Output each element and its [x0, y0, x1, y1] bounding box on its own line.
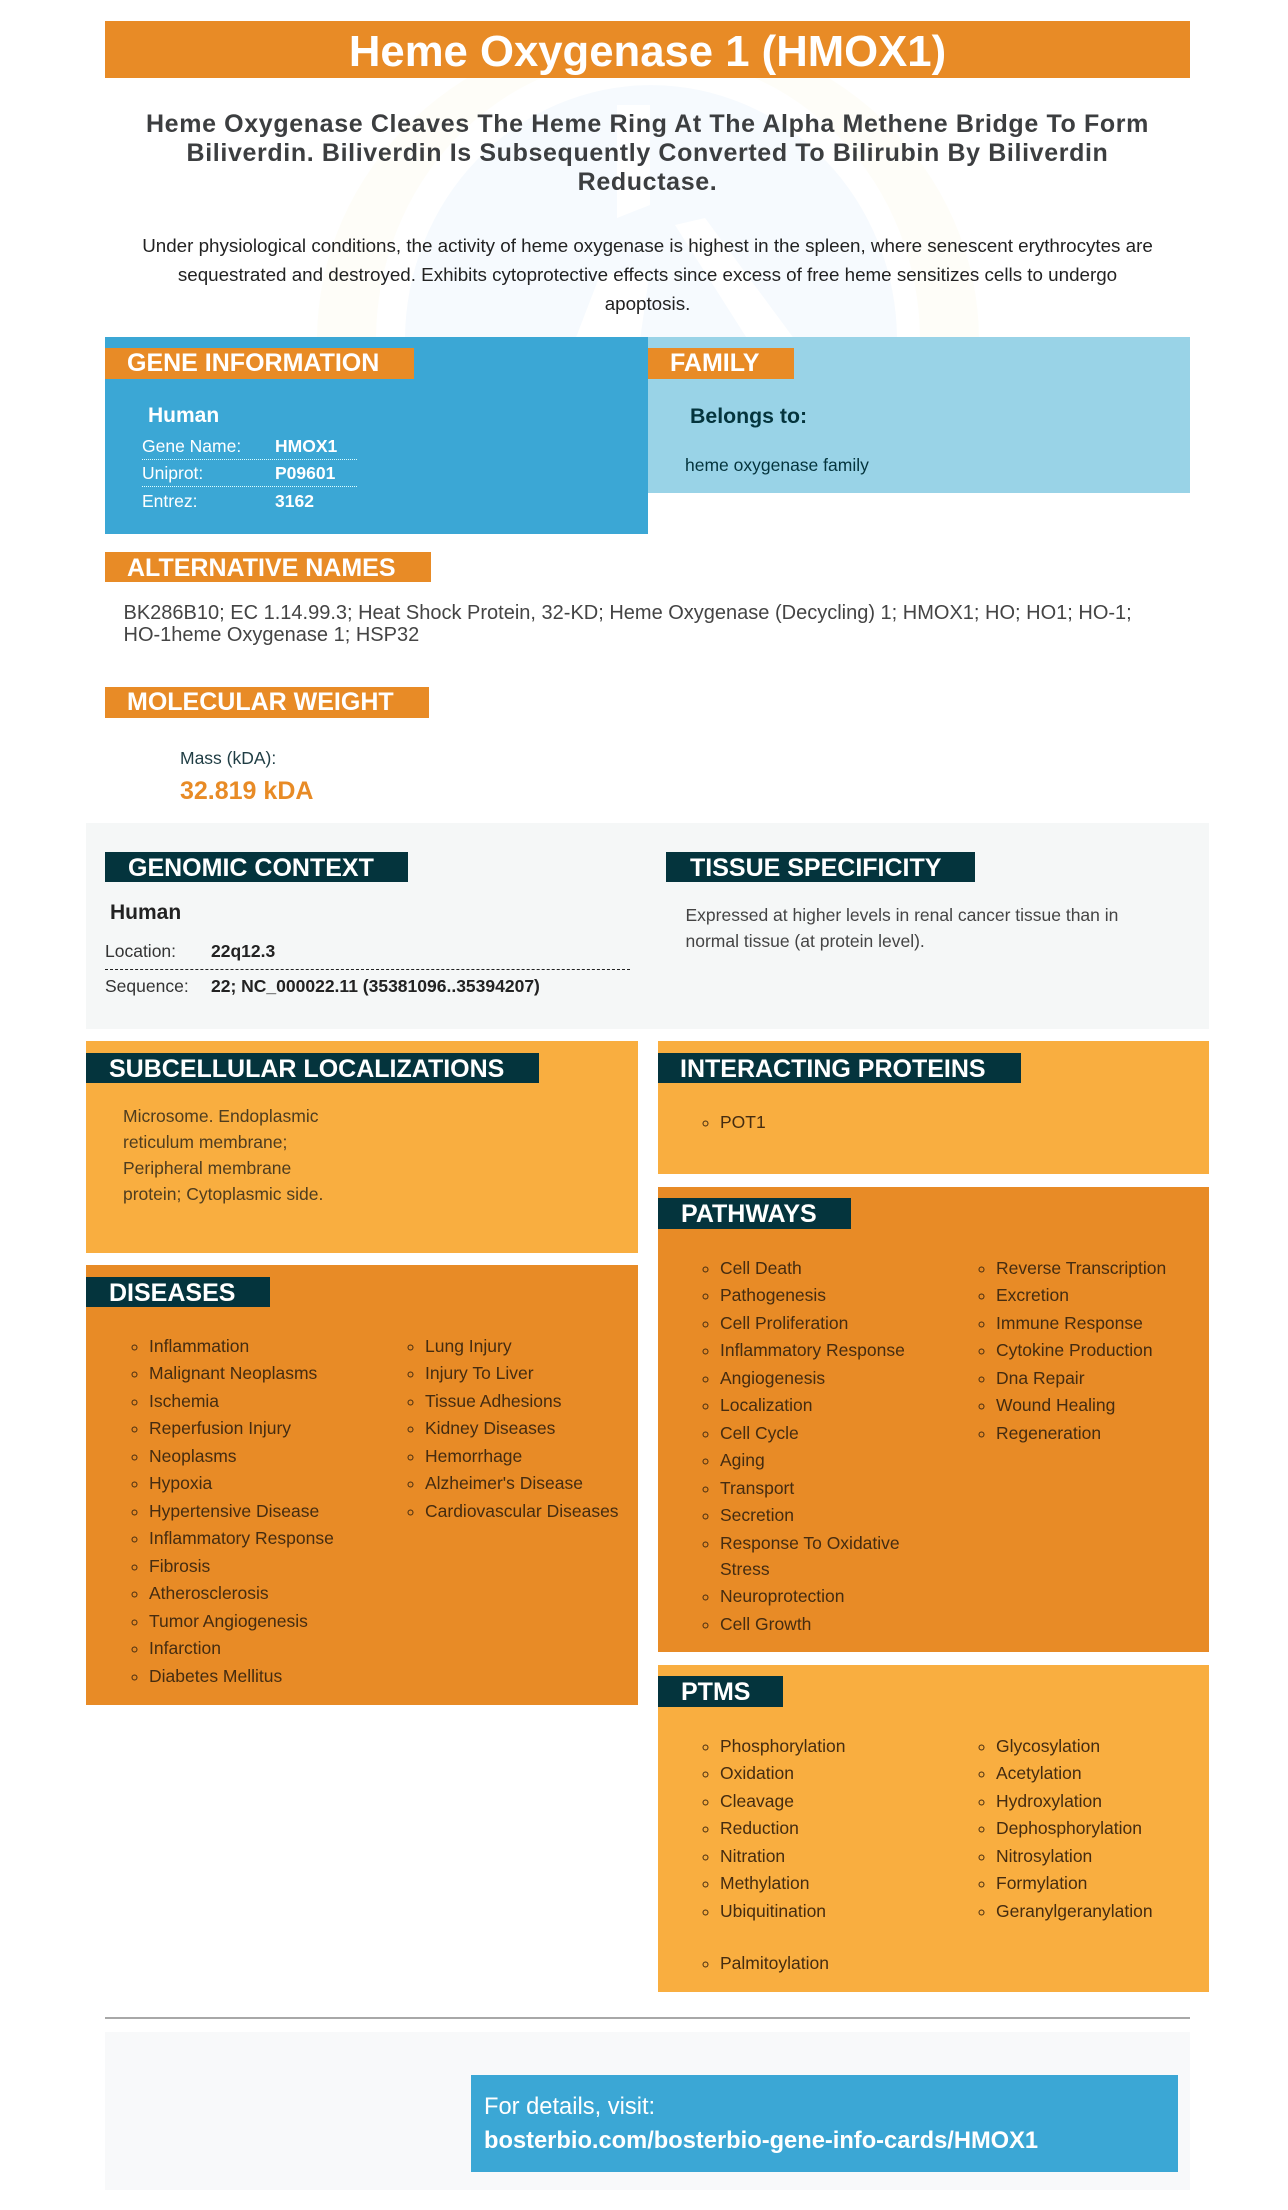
localization text: reticulum membrane;	[123, 1132, 287, 1152]
heading: pathways: PATHWAYS	[681, 1200, 817, 1228]
diseases list column 1: Malignant Neoplasms	[149, 1363, 317, 1383]
panel: subcellular localizations	[86, 1041, 638, 1253]
diseases list column 1: Hypertensive Disease	[149, 1501, 319, 1521]
diseases list column 2: Tissue Adhesions	[425, 1391, 562, 1411]
diseases list column 2: Alzheimer's Disease	[425, 1473, 583, 1493]
uniprot row: P09601	[275, 463, 335, 483]
uniprot row: Uniprot:	[142, 463, 203, 483]
pathways list column 1: Pathogenesis	[720, 1285, 826, 1305]
ptms list column 1: Palmitoylation	[720, 1953, 829, 1973]
gene name row	[142, 433, 357, 460]
ptms list column 2: Hydroxylation	[996, 1791, 1102, 1811]
diseases list column 1: Tumor Angiogenesis	[149, 1611, 308, 1631]
ptms list column 1	[702, 1736, 846, 1973]
ptms list column 2: Dephosphorylation	[996, 1818, 1142, 1838]
protein list: POT1	[720, 1112, 766, 1132]
heading: alternative names: ALTERNATIVE NAMES	[127, 554, 396, 582]
diseases list column 2	[408, 1336, 619, 1521]
ptms list column 1: Reduction	[720, 1818, 799, 1838]
pathways list column 2: Immune Response	[996, 1313, 1143, 1333]
pathways list column 1: Cell Cycle	[720, 1423, 799, 1443]
species label: Human	[110, 901, 181, 924]
localization text	[123, 1106, 323, 1204]
diseases list column 2: Injury To Liver	[425, 1363, 534, 1383]
panel: family	[648, 337, 1190, 493]
pathways list column 2: Excretion	[996, 1285, 1069, 1305]
entrez row	[142, 491, 314, 511]
entrez row: 3162	[275, 491, 314, 511]
pathways list column 1: Cell Proliferation	[720, 1313, 848, 1333]
pathways list column 1: Neuroprotection	[720, 1586, 845, 1606]
ptms list column 1: Methylation	[720, 1873, 810, 1893]
subtitle: Biliverdin. Biliverdin Is Subsequently Converted To Bilirubin By Biliverdin	[187, 139, 1108, 167]
panel: interacting proteins	[658, 1041, 1209, 1174]
ptms list column 1: Oxidation	[720, 1763, 794, 1783]
heading: pathways	[658, 1198, 851, 1229]
diseases list column 2: Kidney Diseases	[425, 1418, 555, 1438]
family name: heme oxygenase family	[685, 455, 869, 475]
pathways list column 1: Stress	[720, 1559, 770, 1579]
pathways list column 1: Response To Oxidative	[720, 1533, 900, 1553]
pathways list column 2: Wound Healing	[996, 1395, 1115, 1415]
diseases list column 1: Neoplasms	[149, 1446, 237, 1466]
ptms list column 1: Phosphorylation	[720, 1736, 846, 1756]
sequence row: Sequence:	[105, 976, 189, 996]
mass label: Mass (kDA):	[180, 748, 276, 768]
panel: diseases	[86, 1265, 638, 1705]
diseases list column 2: Hemorrhage	[425, 1446, 522, 1466]
diseases list column 1: Ischemia	[149, 1391, 219, 1411]
gene name row: Gene Name:	[142, 436, 241, 456]
heading: family	[648, 348, 794, 379]
alternative names text: HO-1heme Oxygenase 1; HSP32	[124, 624, 419, 646]
location row: Location:	[105, 941, 176, 961]
heading: family: FAMILY	[670, 349, 759, 377]
callout url: bosterbio.com/bosterbio-gene-info-cards/HMOX1	[484, 2128, 1038, 2154]
pathways list column 2: Reverse Transcription	[996, 1258, 1166, 1278]
title banner	[105, 21, 1190, 78]
callout: details link	[471, 2075, 1178, 2172]
pathways list column 1: Inflammatory Response	[720, 1340, 905, 1360]
belongs to label: Belongs to:	[690, 404, 807, 428]
ptms list column 2: Acetylation	[996, 1763, 1082, 1783]
heading: tissue specificity: TISSUE SPECIFICITY	[690, 854, 941, 882]
pathways list column 1: Cell Death	[720, 1258, 802, 1278]
entrez row: Entrez:	[142, 491, 197, 511]
localization text: Microsome. Endoplasmic	[123, 1106, 318, 1126]
ptms list column 1: Ubiquitination	[720, 1901, 826, 1921]
subtitle: Heme Oxygenase Cleaves The Heme Ring At The Alpha Methene Bridge To Form	[146, 110, 1149, 138]
ptms list column 2: Nitrosylation	[996, 1846, 1092, 1866]
diseases list column 1: Inflammation	[149, 1336, 249, 1356]
description paragraph	[142, 235, 1153, 314]
callout label: For details, visit:	[484, 2094, 655, 2120]
pathways list column 1: Cell Growth	[720, 1614, 811, 1634]
ptms list column 1: Nitration	[720, 1846, 785, 1866]
ptms list column 2: Formylation	[996, 1873, 1087, 1893]
heading: subcellular localizations: SUBCELLULAR LOCALIZATIONS	[109, 1055, 504, 1083]
description paragraph: Under physiological conditions, the activity of heme oxygenase is highest in the spleen, where senescent erythrocytes are	[142, 235, 1153, 256]
diseases list column 1: Inflammatory Response	[149, 1528, 334, 1548]
title banner: Heme Oxygenase 1 (HMOX1)	[349, 27, 946, 76]
background watermark logo	[406, 86, 896, 337]
tissue specificity text: Expressed at higher levels in renal cancer tissue than in	[686, 905, 1118, 925]
localization text: protein; Cytoplasmic side.	[123, 1184, 323, 1204]
panel: gene information	[105, 337, 648, 534]
pathways list column 1: Secretion	[720, 1505, 794, 1525]
ptms list column 1: Cleavage	[720, 1791, 794, 1811]
diseases list column 1: Infarction	[149, 1638, 221, 1658]
heading: genomic context: GENOMIC CONTEXT	[128, 854, 374, 882]
diseases list column 1	[132, 1336, 334, 1686]
heading: diseases: DISEASES	[109, 1279, 235, 1307]
alternative names text	[124, 602, 1132, 646]
pathways list column 1	[702, 1258, 905, 1634]
heading: ptms: PTMS	[681, 1678, 750, 1706]
heading: molecular weight: MOLECULAR WEIGHT	[127, 688, 394, 716]
tissue specificity text	[686, 905, 1118, 951]
heading: gene information: GENE INFORMATION	[127, 349, 379, 377]
pathways list column 2: Cytokine Production	[996, 1340, 1153, 1360]
pathways list column 1: Localization	[720, 1395, 812, 1415]
diseases list column 1: Fibrosis	[149, 1556, 210, 1576]
ptms list column 2	[978, 1736, 1153, 1921]
diseases list column 1: Reperfusion Injury	[149, 1418, 291, 1438]
pathways list column 2	[978, 1258, 1166, 1443]
mass value: 32.819 kDA	[180, 777, 313, 805]
ptms list column 2: Glycosylation	[996, 1736, 1100, 1756]
pathways list column 2: Regeneration	[996, 1423, 1101, 1443]
pathways list column 1: Angiogenesis	[720, 1368, 825, 1388]
description paragraph: sequestrated and destroyed. Exhibits cytoprotective effects since excess of free heme sensitizes cells to undergo	[178, 264, 1117, 285]
uniprot row	[142, 460, 357, 487]
diseases list column 1: Diabetes Mellitus	[149, 1666, 282, 1686]
localization text: Peripheral membrane	[123, 1158, 291, 1178]
diseases list column 2: Cardiovascular Diseases	[425, 1501, 619, 1521]
diseases list column 2: Lung Injury	[425, 1336, 512, 1356]
heading: diseases	[86, 1277, 270, 1307]
gene name row: HMOX1	[275, 436, 337, 456]
diseases list column 1: Atherosclerosis	[149, 1583, 269, 1603]
pathways list column 1: Aging	[720, 1450, 765, 1470]
location row	[105, 938, 630, 970]
sequence row: 22; NC_000022.11 (35381096..35394207)	[211, 976, 540, 996]
description paragraph: apoptosis.	[605, 293, 690, 314]
species label: Human	[148, 404, 219, 427]
subtitle	[146, 110, 1149, 196]
diseases list column 1: Hypoxia	[149, 1473, 212, 1493]
location row: 22q12.3	[211, 941, 275, 961]
panel: ptms	[658, 1665, 1209, 1992]
pathways list column 2: Dna Repair	[996, 1368, 1085, 1388]
panel: footer	[105, 2032, 1190, 2190]
alternative names text: BK286B10; EC 1.14.99.3; Heat Shock Protein, 32-KD; Heme Oxygenase (Decycling) 1; HMOX1; HO; HO1; HO-1;	[124, 602, 1132, 624]
panel: pathways	[658, 1187, 1209, 1652]
subtitle: Reductase.	[578, 168, 717, 196]
pathways list column 1: Transport	[720, 1478, 794, 1498]
ptms list column 2: Geranylgeranylation	[996, 1901, 1153, 1921]
heading: ptms	[658, 1676, 783, 1707]
panel: genomic context and tissue specificity	[86, 823, 1209, 1029]
tissue specificity text: normal tissue (at protein level).	[686, 931, 925, 951]
heading: interacting proteins: INTERACTING PROTEINS	[680, 1055, 986, 1083]
